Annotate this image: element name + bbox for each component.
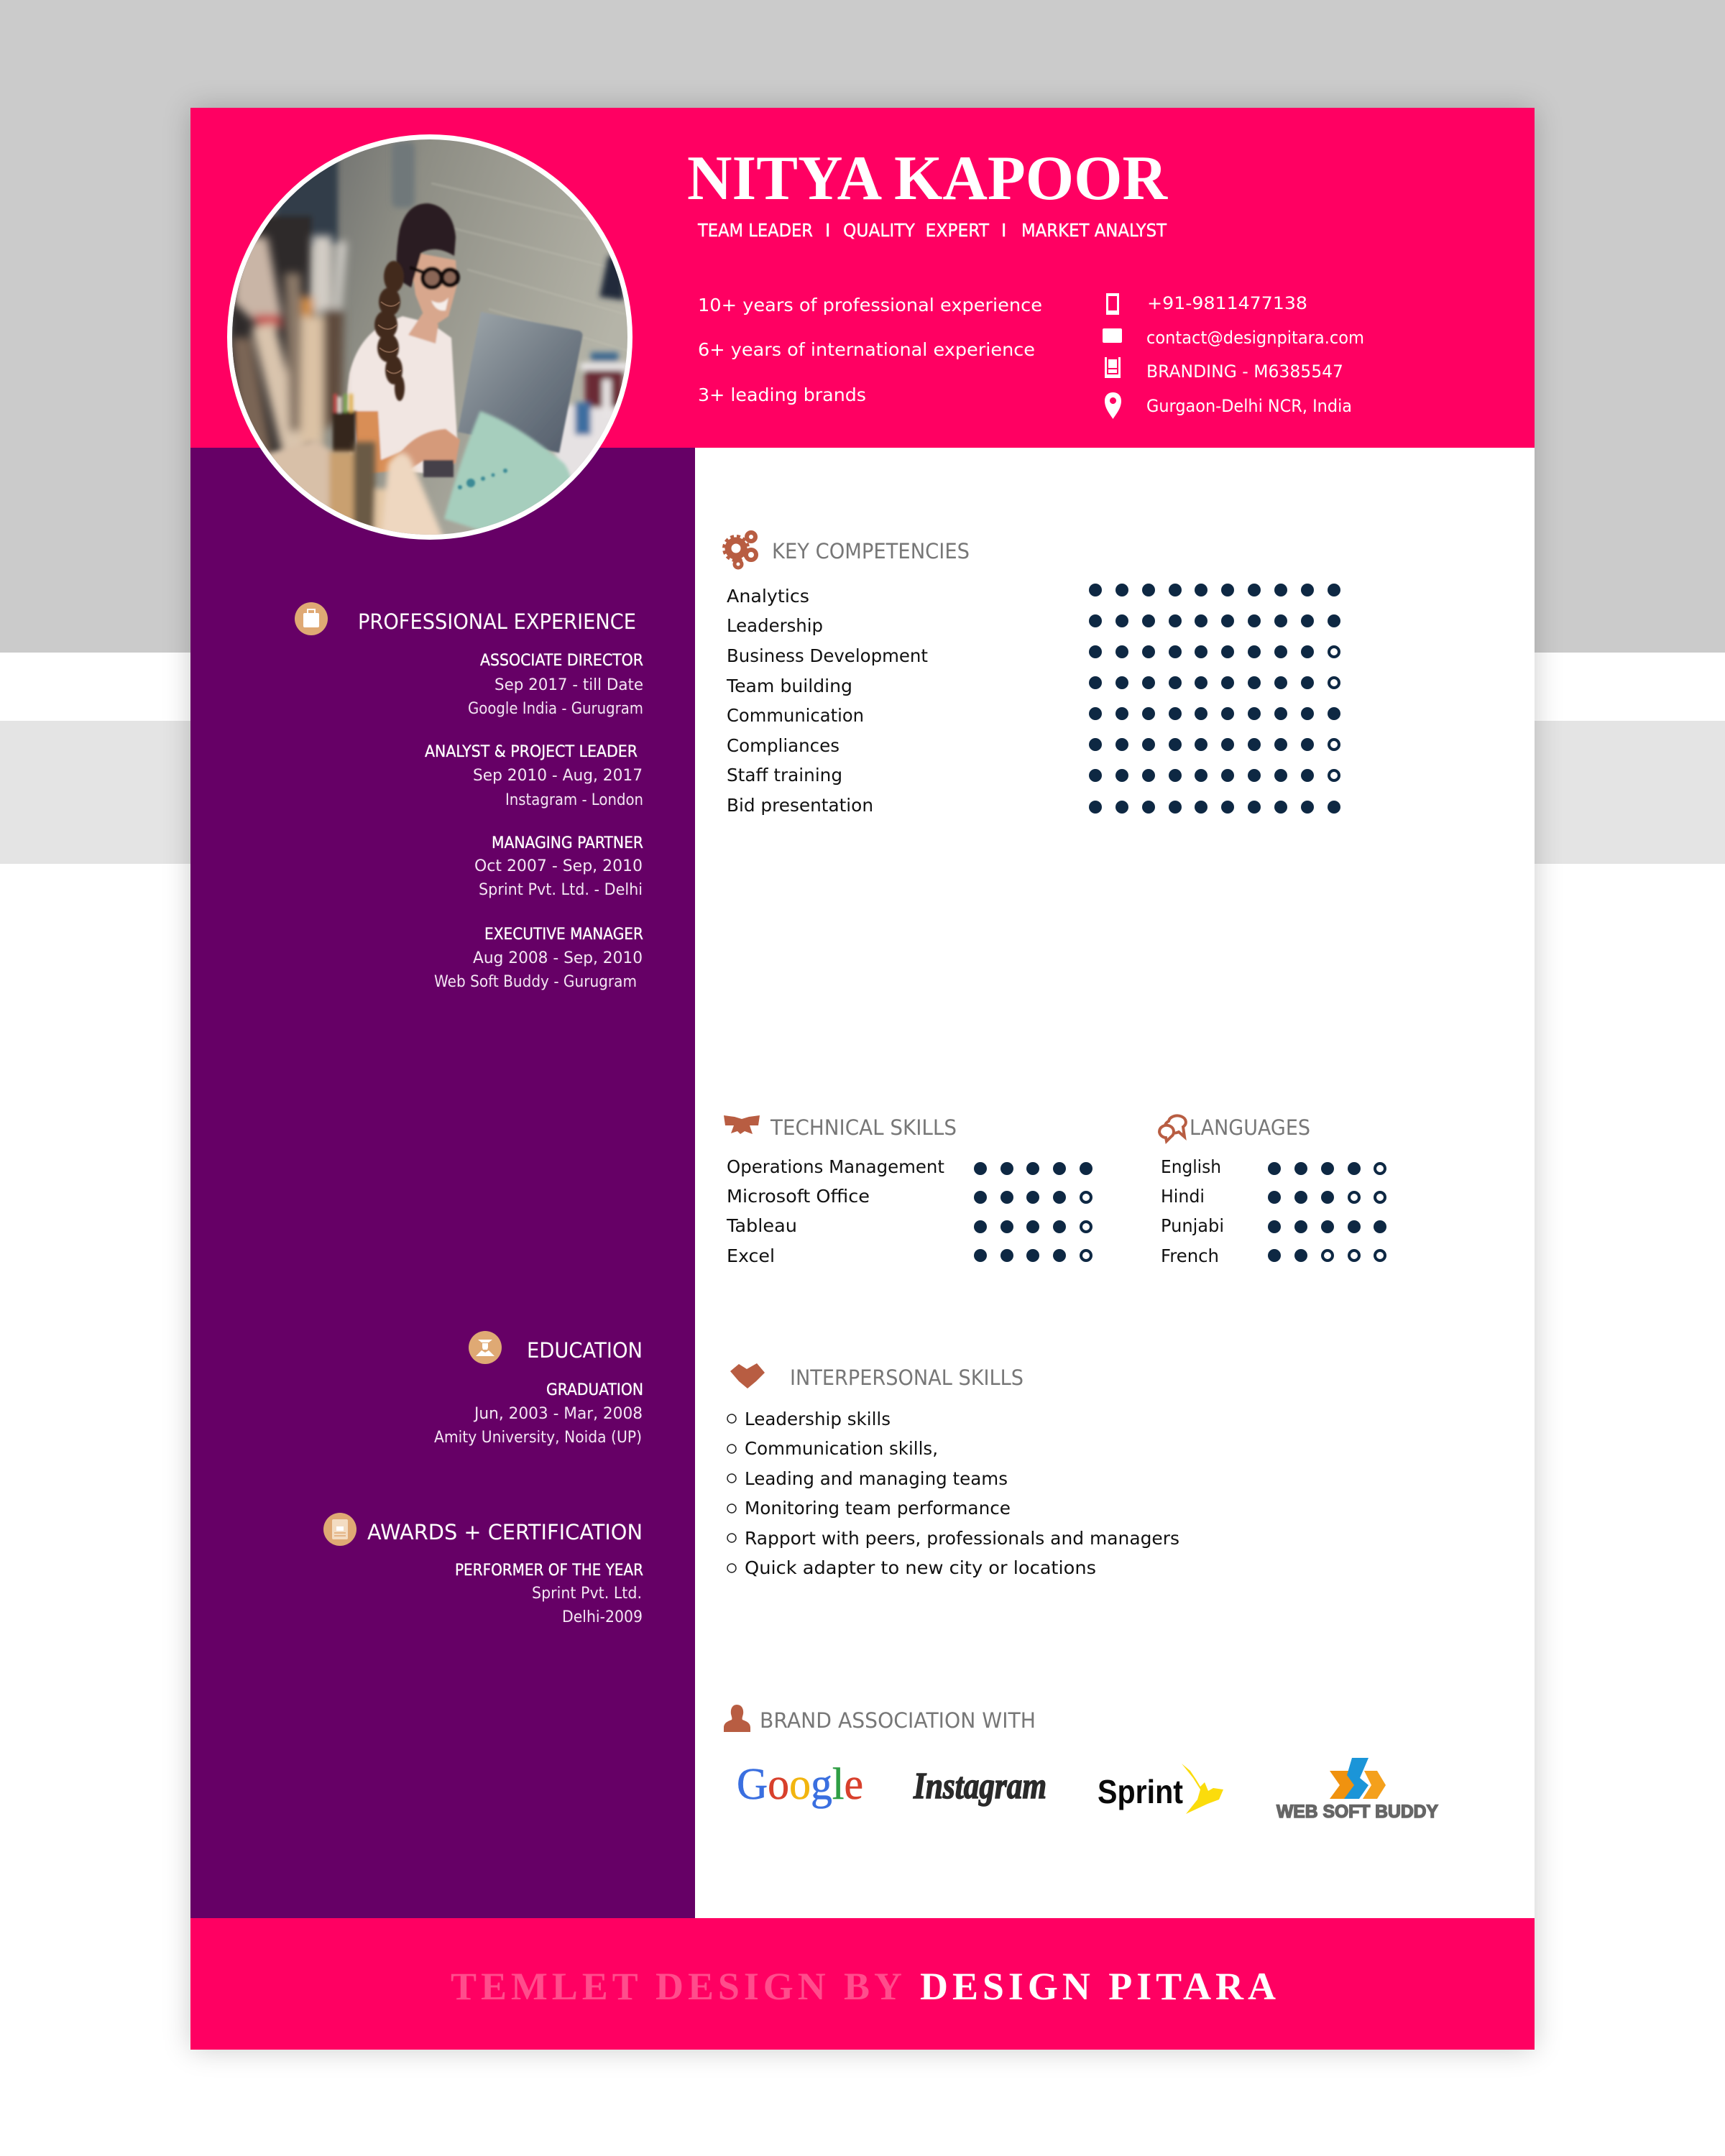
footer credit: DESIGN PITARA <box>920 1965 1276 2008</box>
job: managing partner: Oct 2007 - Sep, 2010 <box>474 857 643 875</box>
competency labels: Leadership <box>727 615 823 636</box>
interpersonal skills list <box>727 1409 1179 1578</box>
heading: professional experience: PROFESSIONAL EXPERIENCE <box>358 609 636 634</box>
icon: branding badge <box>1105 357 1121 378</box>
interpersonal skills list: Quick adapter to new city or locations <box>745 1557 1096 1578</box>
technical skill dot ratings <box>974 1162 1092 1262</box>
competency labels: Analytics <box>727 586 809 607</box>
background band: light grey <box>0 721 1725 864</box>
language labels <box>1161 1156 1224 1266</box>
icon: phone <box>1106 293 1119 315</box>
interpersonal skills list: Rapport with peers, professionals and managers <box>745 1528 1179 1549</box>
language labels: English <box>1161 1156 1221 1177</box>
language dot ratings <box>1268 1162 1386 1262</box>
entry: performer of the year <box>455 1562 643 1626</box>
card shadow <box>190 108 1535 2050</box>
job: managing partner: MANAGING PARTNER <box>492 834 643 852</box>
white resume card <box>190 108 1535 2050</box>
laptop <box>458 312 582 453</box>
entry: graduation: GRADUATION <box>546 1381 643 1399</box>
competency labels: Communication <box>727 705 864 726</box>
entry: performer of the year: PERFORMER OF THE YEAR <box>455 1562 643 1580</box>
icon: handshake ribbon <box>724 1115 760 1134</box>
section: technical skills <box>724 1115 1092 1266</box>
section: key competencies <box>724 533 1340 816</box>
interpersonal skills list: Communication skills, <box>745 1438 938 1459</box>
job: associate director <box>468 652 643 718</box>
icon: gears <box>724 533 756 568</box>
competency labels: Compliances <box>727 735 840 756</box>
competency labels: Staff training <box>727 765 842 786</box>
logo: sprint: Sprint <box>1098 1773 1183 1810</box>
job: analyst and project leader: Sep 2010 - Aug, 2017 <box>473 767 643 785</box>
panel: header band <box>190 108 1535 448</box>
foreground brushes <box>232 229 351 459</box>
logo: web soft buddy: WEB SOFT BUDDY <box>1276 1802 1438 1822</box>
heading: brand association: BRAND ASSOCIATION WITH <box>760 1708 1036 1733</box>
competency dot ratings <box>1089 584 1340 814</box>
heading: awards and certification: AWARDS + CERTIFICATION <box>367 1520 643 1544</box>
entry: graduation <box>434 1381 643 1447</box>
icon: location pin <box>1105 392 1121 419</box>
icon: envelope <box>1103 328 1122 343</box>
language labels: French <box>1161 1245 1219 1266</box>
logo: web soft buddy <box>1276 1758 1438 1822</box>
section: brand association <box>724 1705 1438 1822</box>
entry: graduation: Amity University, Noida (UP) <box>434 1429 642 1447</box>
logo: instagram: Instagram <box>913 1766 1046 1807</box>
experience highlights: 10+ years of professional experience <box>698 295 1042 315</box>
experience highlights: 6+ years of international experience <box>698 339 1035 360</box>
job titles subtitle: I <box>1001 220 1006 241</box>
job titles subtitle: MARKET ANALYST <box>1021 220 1167 241</box>
language labels: Punjabi <box>1161 1215 1224 1236</box>
phone number: +91-9811477138 <box>1147 293 1307 313</box>
job titles subtitle: TEAM LEADER <box>697 220 813 241</box>
section: awards and certification <box>323 1513 643 1626</box>
job: associate director: ASSOCIATE DIRECTOR <box>480 652 643 670</box>
logo: google: Google <box>737 1760 863 1809</box>
branding id: BRANDING - M6385547 <box>1146 361 1343 382</box>
job: executive manager: EXECUTIVE MANAGER <box>484 926 643 944</box>
heading: interpersonal skills: INTERPERSONAL SKILLS <box>790 1365 1024 1390</box>
name title: NITYA KAPOOR <box>687 144 1168 213</box>
job: associate director: Google India - Gurugram <box>468 700 643 718</box>
section: professional experience <box>295 602 643 991</box>
job: managing partner: Sprint Pvt. Ltd. - Delhi <box>479 881 643 899</box>
background band: dark grey <box>0 0 1725 653</box>
profile photo <box>227 134 632 546</box>
competency labels: Bid presentation <box>727 795 873 816</box>
interpersonal skills list: Leadership skills <box>745 1409 891 1429</box>
contact details <box>1103 293 1364 419</box>
panel: purple sidebar <box>190 448 695 1919</box>
icon: handshake heart <box>730 1363 765 1388</box>
icon: speech bubbles <box>1159 1115 1186 1141</box>
logo: sprint <box>1098 1764 1223 1814</box>
job titles subtitle <box>697 220 1167 241</box>
interpersonal skills list: Leading and managing teams <box>745 1468 1008 1489</box>
entry: performer of the year: Sprint Pvt. Ltd. <box>532 1585 642 1603</box>
job: associate director: Sep 2017 - till Date <box>494 676 643 694</box>
technical skill labels: Tableau <box>726 1215 797 1236</box>
section: interpersonal skills <box>727 1363 1179 1578</box>
job: analyst and project leader: Instagram - London <box>505 791 643 809</box>
email address: contact@designpitara.com <box>1146 328 1364 348</box>
job: executive manager <box>434 926 643 991</box>
technical skill labels: Excel <box>727 1245 775 1266</box>
job: analyst and project leader <box>425 743 643 809</box>
heading: education: EDUCATION <box>527 1338 643 1363</box>
technical skill labels: Operations Management <box>727 1156 944 1177</box>
icon: person <box>724 1705 750 1732</box>
job: analyst and project leader: ANALYST & PROJECT LEADER <box>425 743 638 761</box>
entry: performer of the year: Delhi-2009 <box>562 1608 643 1626</box>
competency labels: Business Development <box>727 645 928 666</box>
job: managing partner <box>474 834 643 899</box>
footer credit: TEMLET DESIGN BY <box>451 1965 902 2008</box>
experience highlights: 3+ leading brands <box>698 384 866 405</box>
woman <box>346 203 458 474</box>
job titles subtitle: I <box>825 220 830 241</box>
job: executive manager: Web Soft Buddy - Gurugram <box>434 973 637 991</box>
competency labels: Team building <box>726 676 852 696</box>
section: languages <box>1159 1115 1386 1266</box>
icon: graduate <box>469 1331 502 1364</box>
job: executive manager: Aug 2008 - Sep, 2010 <box>473 949 643 967</box>
icon: certificate <box>323 1513 356 1546</box>
footer credit <box>451 1965 1276 2008</box>
location: Gurgaon-Delhi NCR, India <box>1146 396 1352 416</box>
interpersonal skills list: Monitoring team performance <box>745 1498 1011 1519</box>
language labels: Hindi <box>1161 1186 1205 1207</box>
experience highlights <box>698 295 1042 405</box>
technical skill labels <box>726 1156 944 1266</box>
heading: technical skills: TECHNICAL SKILLS <box>770 1115 957 1140</box>
heading: key competencies: KEY COMPETENCIES <box>772 539 970 563</box>
section: education <box>434 1331 643 1447</box>
icon: briefcase <box>295 602 328 635</box>
entry: graduation: Jun, 2003 - Mar, 2008 <box>473 1405 643 1423</box>
heading: languages: LANGUAGES <box>1190 1115 1310 1140</box>
braid <box>374 261 405 401</box>
panel: footer band <box>190 1918 1535 2050</box>
job titles subtitle: QUALITY EXPERT <box>843 220 990 241</box>
technical skill labels: Microsoft Office <box>727 1186 870 1207</box>
competency labels <box>726 586 928 816</box>
